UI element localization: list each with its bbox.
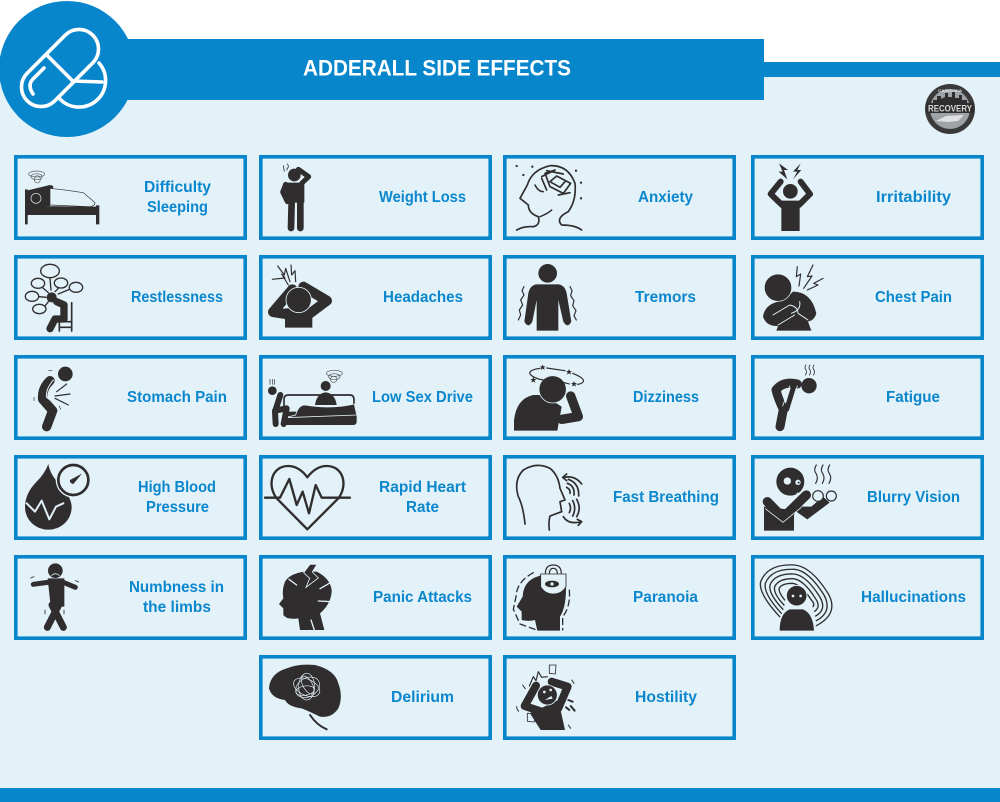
- icon: angry person with raised arms: [517, 665, 575, 730]
- label: Pressure: [146, 499, 209, 516]
- icon: blood drop with gauge: [25, 462, 91, 530]
- icon: person with binoculars: [764, 465, 836, 531]
- card: High Blood Pressure: [16, 457, 245, 538]
- card: Restlessness: [16, 257, 245, 338]
- icon: tired bent-over person: [776, 365, 817, 427]
- icon: head with tangled thoughts: [515, 165, 582, 230]
- header banner: [0, 1, 1000, 137]
- label: Fatigue: [886, 389, 940, 406]
- card: Rapid Heart Rate: [261, 457, 490, 538]
- label: Difficulty: [144, 179, 211, 196]
- icon: seated person with thought bubbles: [25, 264, 83, 331]
- card: Hostility: [505, 657, 734, 738]
- card: Tremors: [505, 257, 734, 338]
- card: Panic Attacks: [261, 557, 490, 638]
- bottom bar: [0, 788, 1000, 802]
- icon: pills: [21, 29, 106, 107]
- label: Tremors: [635, 289, 696, 306]
- label: Rate: [406, 499, 439, 516]
- icon: head with locked eye: [513, 565, 570, 631]
- label: [138, 479, 216, 516]
- icon: person inside swirling lines: [760, 565, 832, 631]
- card: Fast Breathing: [505, 457, 734, 538]
- label: Panic Attacks: [373, 589, 472, 606]
- card: Anxiety: [505, 157, 734, 238]
- icon: angry person with bolts: [771, 163, 810, 231]
- icon: heart with pulse: [265, 466, 350, 529]
- icon: trembling person: [518, 264, 576, 331]
- label: Weight Loss: [379, 189, 466, 206]
- label: Fast Breathing: [613, 489, 719, 506]
- icon: brain with tangled scribble: [269, 665, 341, 729]
- icon: person with stars circling head: [514, 364, 584, 431]
- card: Difficulty Sleeping: [16, 157, 245, 238]
- label: [379, 479, 466, 516]
- label: Low Sex Drive: [372, 389, 473, 406]
- label: Rapid Heart: [379, 479, 466, 496]
- label: [129, 579, 224, 616]
- label: the limbs: [143, 599, 211, 616]
- logo: Carolina Recovery seal: [925, 84, 975, 134]
- icon: head profile with breath arrows: [517, 465, 582, 530]
- label: Hostility: [635, 689, 697, 706]
- card: Blurry Vision: [753, 457, 982, 538]
- card: Dizziness: [505, 357, 734, 438]
- card: Irritability: [753, 157, 982, 238]
- label: Sleeping: [147, 199, 208, 216]
- label: [144, 179, 211, 216]
- icon: person with numb limbs: [31, 563, 79, 627]
- card: Delirium: [261, 657, 490, 738]
- label: Stomach Pain: [127, 389, 227, 406]
- icon: person holding head: [272, 265, 327, 328]
- label: Chest Pain: [875, 289, 952, 306]
- label: Delirium: [391, 689, 454, 706]
- card: Fatigue: [753, 357, 982, 438]
- label: Hallucinations: [861, 589, 966, 606]
- card: Low Sex Drive: [261, 357, 490, 438]
- card: Stomach Pain: [16, 357, 245, 438]
- card: Paranoia: [505, 557, 734, 638]
- card: Chest Pain: [753, 257, 982, 338]
- label: Irritability: [876, 189, 951, 206]
- icon: person holding stomach: [34, 367, 73, 427]
- label: Blurry Vision: [867, 489, 960, 506]
- title: ADDERALL SIDE EFFECTS: [303, 56, 571, 80]
- icon: person clutching chest: [763, 265, 823, 331]
- icon: couple in bed: [268, 370, 357, 425]
- label: Anxiety: [638, 189, 693, 206]
- icon: thin person scratching head: [283, 164, 309, 228]
- card: Numbness in the limbs: [16, 557, 245, 638]
- card: Hallucinations: [753, 557, 982, 638]
- label: High Blood: [138, 479, 216, 496]
- card: Headaches: [261, 257, 490, 338]
- logo: Carolina Recovery seal: CAROLINA: [938, 88, 962, 93]
- card: Weight Loss: [261, 157, 490, 238]
- label: Dizziness: [633, 389, 699, 406]
- label: Headaches: [383, 289, 463, 306]
- icon: person in bed: [25, 171, 99, 224]
- icon: cracked head: [279, 564, 332, 630]
- logo: Carolina Recovery seal: RECOVERY: [928, 104, 972, 114]
- label: Numbness in: [129, 579, 224, 596]
- label: Paranoia: [633, 589, 698, 606]
- label: Restlessness: [131, 289, 223, 306]
